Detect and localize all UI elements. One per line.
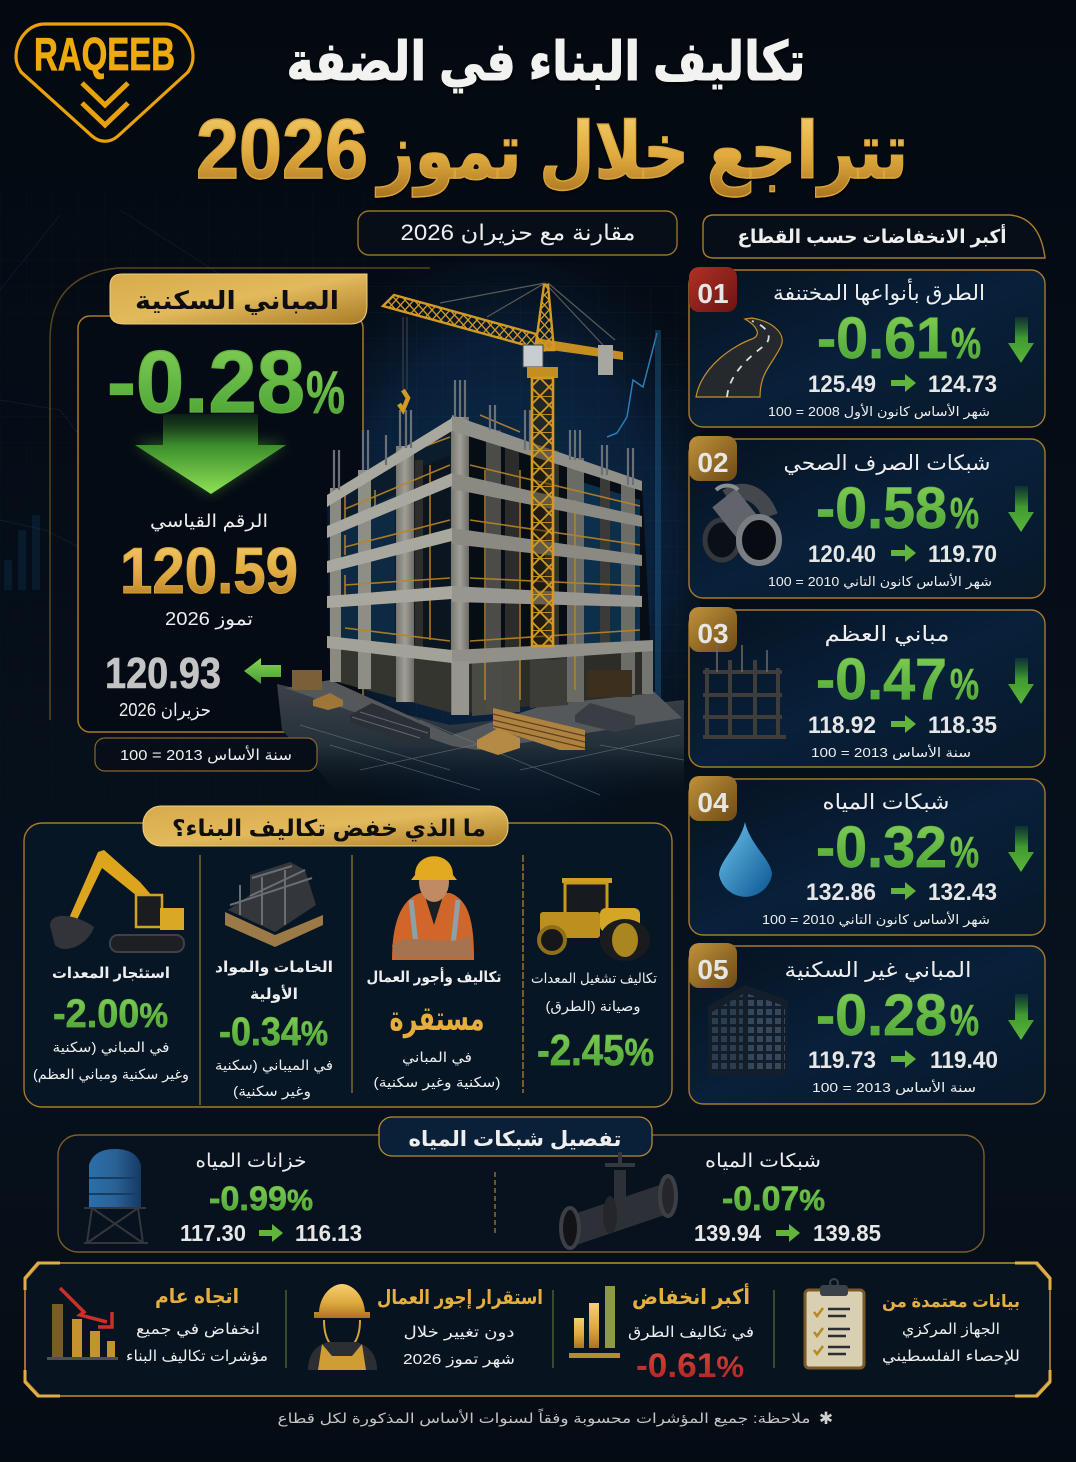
ground floor walls (330, 645, 452, 713)
text: في تكاليف الطرق (628, 1324, 754, 1342)
network values: 139.85 (813, 1220, 881, 1246)
icon: valve pipe (561, 1152, 676, 1248)
value: -2.00% (53, 992, 168, 1036)
icon: clipboard (805, 1279, 864, 1368)
text: انخفاض في جميع (136, 1321, 260, 1339)
values (808, 541, 997, 568)
label line 2: وصيانة (الطرق) (546, 998, 640, 1015)
network label: شبكات المياه (705, 1151, 821, 1172)
arrow: left green (244, 658, 281, 684)
icon: worker (392, 856, 474, 960)
index value June: 120.93 (105, 649, 221, 698)
percent: -0.58 (816, 476, 947, 541)
percent: -0.47 (816, 647, 947, 712)
arrow: down (1008, 994, 1034, 1040)
logo: Raqeeb: RAQEEB (34, 28, 175, 80)
section: verified data (805, 1279, 1020, 1368)
values: 132.43 (928, 879, 997, 906)
interior columns (415, 460, 423, 650)
note line 2: وغير سكنية ومباني العظم) (33, 1066, 189, 1083)
values (808, 1047, 998, 1074)
note: في المباني (سكنية (52, 1039, 170, 1056)
panel: key takeaways band (25, 1263, 1050, 1396)
icon: excavator (50, 850, 184, 952)
title line 2 gold (196, 102, 908, 197)
panel heading: ما الذي خفض تكاليف البناء؟ (172, 815, 486, 842)
card title: المباني غير السكنية (784, 959, 972, 982)
tank percent: -0.99% (209, 1180, 313, 1218)
values (808, 712, 997, 739)
percent: % (950, 996, 979, 1045)
values: 119.73 (808, 1047, 876, 1074)
note line 2: وغير سكنية) (233, 1083, 311, 1100)
icon: water tank (84, 1149, 148, 1243)
card 02: sewage (689, 436, 1045, 598)
tank label: خزانات المياه (196, 1151, 306, 1172)
label: استئجار المعدات (52, 965, 170, 982)
label line 2: الأولية (250, 985, 298, 1003)
badge 01: 01 (697, 278, 729, 309)
sector heading pill (703, 215, 1045, 258)
card title: شبكات الصرف الصحي (784, 452, 990, 475)
card 04: water networks (689, 776, 1045, 935)
timber and rebar stacks (493, 708, 585, 750)
values: 118.35 (928, 712, 997, 739)
title line 2 gold: 2026 (196, 102, 368, 196)
column: labour (366, 856, 502, 1091)
icon: road roller (539, 878, 650, 961)
base note: شهر الأساس كانون الأول 2008 = 100 (768, 403, 990, 420)
railings (345, 415, 640, 700)
heading: اتجاه عام (155, 1286, 239, 1308)
columns (330, 488, 341, 682)
arrow: down (1008, 658, 1034, 704)
values: 125.49 (808, 371, 876, 398)
ground (277, 684, 684, 795)
value: -2.45% (537, 1026, 654, 1075)
rebars (334, 380, 633, 490)
base note: شهر الأساس كانون التاني 2010 = 100 (768, 573, 992, 590)
base year pill (95, 738, 317, 771)
icon: falling bars with arrow (47, 1288, 118, 1360)
percent: -0.28 (816, 983, 947, 1048)
icon: pipe (705, 486, 779, 563)
tank values: 116.13 (295, 1220, 362, 1246)
panel: what lowered construction costs (24, 806, 672, 1107)
illustration: building with crane (277, 283, 684, 795)
comparison pill (358, 211, 677, 255)
title line 2 gold: تتراجع خلال تموز (375, 107, 908, 197)
month label June: حزيران 2026 (119, 700, 211, 721)
label: تكاليف تشغيل المعدات (531, 970, 657, 986)
heading: بيانات معتمدة من (882, 1292, 1020, 1312)
panel heading (379, 1117, 652, 1156)
logo: Raqeeb (16, 24, 193, 141)
month label July: تموز 2026 (165, 609, 253, 630)
badge 02: 02 (697, 447, 729, 478)
badge 05 (689, 943, 737, 988)
icon: building frame (703, 645, 786, 737)
tank values: 117.30 (180, 1220, 246, 1246)
crane (440, 283, 615, 345)
value: -0.61% (636, 1347, 744, 1385)
card title: شبكات المياه (822, 791, 950, 814)
wings back (327, 422, 452, 713)
values: 132.86 (806, 879, 876, 906)
value stable: مستقرة (390, 1000, 484, 1039)
label: الخامات والمواد (215, 959, 333, 976)
footnote: ✱ (819, 1409, 833, 1429)
value: -0.34% (219, 1010, 328, 1054)
values: 118.92 (808, 712, 876, 739)
badge 02 (689, 436, 737, 481)
base note: شهر الأساس كانون التاني 2010 = 100 (762, 911, 990, 928)
index value July: 120.59 (120, 534, 298, 607)
corner pillar front (452, 661, 469, 715)
base note: سنة الأساس 2013 = 100 (812, 1079, 976, 1096)
panel frame: residential (50, 268, 430, 720)
values (808, 371, 997, 398)
values: 124.73 (928, 371, 997, 398)
icon: road (696, 318, 782, 397)
network percent: -0.07% (722, 1180, 825, 1218)
big green down arrow (135, 414, 286, 494)
panel: water networks detail (58, 1117, 984, 1252)
text line 2: للإحصاء الفلسطيني (882, 1348, 1020, 1366)
comparison pill: مقارنة مع حزيران 2026 (400, 220, 636, 245)
values: 119.40 (930, 1047, 998, 1074)
sector heading pill: أكبر الانخفاضات حسب القطاع (738, 224, 1006, 248)
column: equipment rental (33, 850, 189, 1083)
network values (694, 1220, 881, 1246)
big percentage: -0.28 (107, 332, 305, 431)
badge 04 (689, 776, 737, 821)
tank values (180, 1220, 362, 1246)
text: دون تغيير خلال (404, 1324, 514, 1341)
icon: water drop (719, 822, 772, 897)
icon: steel beams (225, 862, 323, 947)
header ribbon: residential buildings: المباني السكنية (135, 287, 339, 315)
note: في الميباني (سكنية (215, 1057, 333, 1074)
heading: استقرار إجور العمال (377, 1287, 543, 1309)
base note: سنة الأساس 2013 = 100 (811, 744, 971, 761)
arrow: down (1008, 317, 1034, 363)
badge 03 (689, 607, 737, 652)
arrow: down (1008, 486, 1034, 532)
icon: worker silhouette (308, 1284, 377, 1370)
card 01: roads (689, 267, 1045, 427)
percent: % (951, 319, 981, 368)
network values: 139.94 (694, 1220, 761, 1246)
arrow: down (1008, 826, 1034, 872)
icon: office building (708, 985, 788, 1075)
text: الجهاز المركزي (902, 1321, 1000, 1339)
column: road equipment (531, 878, 657, 1075)
badge 04: 04 (697, 787, 729, 818)
footnote: ملاحظة: جميع المؤشرات محسوبة وفقاً لسنوات الأساس المذكورة لكل قطاع (278, 1408, 810, 1427)
note line 2: (سكنية وغير سكنية) (374, 1074, 500, 1091)
footnote (278, 1408, 833, 1429)
percent: % (950, 489, 979, 538)
label: تكاليف وأجور العمال (366, 967, 502, 986)
percent: % (950, 660, 979, 709)
title line 1: تكاليف البناء في الضفة (286, 32, 806, 93)
index label: الرقم القياسي (150, 511, 268, 532)
panel: residential buildings background (78, 316, 363, 732)
badge 03: 03 (697, 618, 729, 649)
heading: أكبر انخفاض (632, 1282, 750, 1309)
text line 2: مؤشرات تكاليف البناء (126, 1348, 268, 1365)
section: biggest drop (569, 1282, 754, 1385)
column: raw materials (215, 862, 333, 1100)
card 03: skeleton buildings (689, 607, 1045, 767)
values: 120.40 (808, 541, 876, 568)
panel heading: تفصيل شبكات المياه (408, 1128, 622, 1151)
slabs (327, 418, 452, 507)
values: 119.70 (928, 541, 997, 568)
percent: -0.61 (817, 306, 948, 371)
section: wage stability (308, 1284, 543, 1370)
section: general trend (47, 1286, 268, 1365)
badge 05: 05 (697, 954, 729, 985)
badge 01 (689, 267, 737, 312)
card title: مباني العظم (824, 623, 950, 647)
card title: الطرق بأنواعها المختنفة (773, 278, 985, 305)
text line 2: شهر تموز 2026 (403, 1351, 515, 1368)
values (806, 879, 997, 906)
big percentage: % (306, 359, 345, 426)
header ribbon: residential buildings (110, 274, 367, 324)
percent: % (950, 828, 979, 877)
percent: -0.32 (816, 815, 947, 880)
icon: bars (569, 1286, 620, 1358)
note: في المباني (402, 1049, 472, 1066)
panel heading (143, 806, 508, 846)
base year pill: سنة الأساس 2013 = 100 (120, 745, 292, 764)
card 05: non-residential (689, 943, 1045, 1104)
